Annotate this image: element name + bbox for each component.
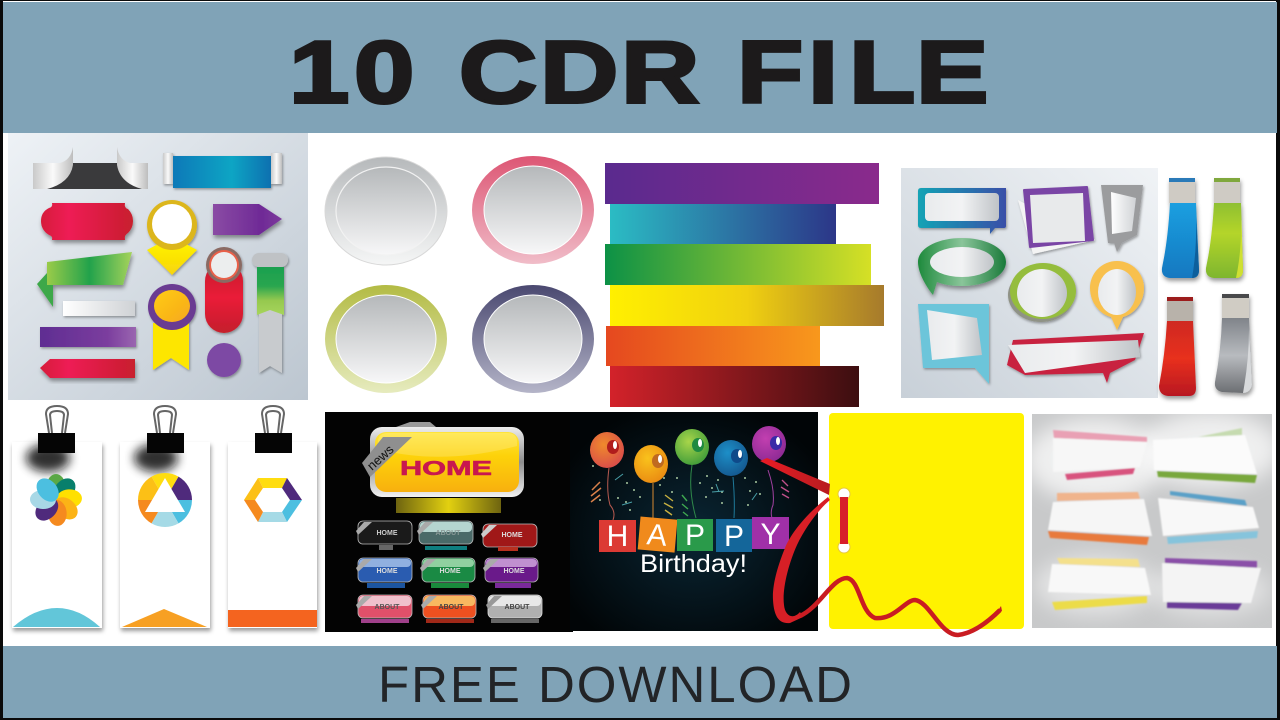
red plaque label <box>41 203 133 240</box>
happy letter tiles: A <box>646 518 668 553</box>
panel: speech bubbles <box>901 168 1158 398</box>
happy letter tiles: P <box>724 520 744 553</box>
large home button <box>362 422 524 513</box>
small button green: HOME <box>440 568 461 575</box>
small button green <box>420 558 475 588</box>
orange triangle footer <box>122 609 207 627</box>
hanging tag: triangle logo <box>120 406 210 628</box>
orange round bubble <box>1090 261 1144 330</box>
hanging tag: flower logo <box>12 406 102 628</box>
ink smudge <box>26 444 70 472</box>
green folded ribbon <box>37 252 132 307</box>
small button blue <box>356 558 412 588</box>
happy letter tiles: Y <box>760 518 781 551</box>
flower logo <box>30 474 83 527</box>
binder clip <box>255 406 292 453</box>
panel: web buttons <box>325 412 573 632</box>
birthday caption: Birthday! <box>640 550 747 578</box>
small button pink <box>356 595 412 623</box>
crimson ribbon bubble <box>1007 333 1144 383</box>
header band <box>0 2 1277 133</box>
small button silver <box>486 595 542 623</box>
hanging tag: hexagon logo <box>228 406 317 628</box>
confetti <box>591 465 789 516</box>
grey trapezoid bubble <box>1101 185 1143 252</box>
gold stand <box>396 498 501 513</box>
hexagon logo <box>244 478 302 522</box>
red ribbon <box>760 458 1002 635</box>
blue tab <box>1162 178 1199 278</box>
stacked colour bars <box>605 163 884 407</box>
blue banner <box>1158 491 1259 544</box>
pink banner <box>1053 430 1147 480</box>
small button orange <box>421 595 476 623</box>
ink smudge <box>134 444 178 472</box>
panel: yellow sheet <box>829 413 1024 629</box>
plain silver circle <box>325 157 447 265</box>
small button purple <box>483 558 538 588</box>
orange bar footer <box>228 610 317 627</box>
yellow medal ribbon <box>148 284 196 370</box>
blue scroll banner <box>163 153 282 188</box>
title: 10 CDR FILE <box>0 23 988 121</box>
slate circle <box>472 285 594 393</box>
purple square bubble <box>1018 187 1095 254</box>
binder clip <box>147 406 184 453</box>
panel: ribbons and banners <box>8 133 308 400</box>
small button red <box>481 524 537 551</box>
triangle wheel logo <box>138 473 192 527</box>
binder clip <box>38 406 75 453</box>
footer band <box>3 646 1277 718</box>
small button red: HOME <box>502 532 523 539</box>
green tab <box>1206 178 1243 278</box>
panel: happy birthday card <box>570 412 818 631</box>
ribbon slot <box>838 488 850 553</box>
home label: HOME <box>400 458 492 480</box>
balloons <box>590 426 786 483</box>
violet banner <box>1162 558 1261 610</box>
footer caption: FREE DOWNLOAD <box>378 656 852 713</box>
pink circle <box>472 156 594 264</box>
happy letter tiles <box>599 516 789 554</box>
red tab <box>1159 297 1196 396</box>
yellow circle arrow badge <box>147 200 197 275</box>
purple bar <box>40 327 136 347</box>
small button black: HOME <box>376 530 398 537</box>
yellow banner <box>1048 558 1151 610</box>
small button pink: ABOUT <box>375 604 400 611</box>
small button black <box>356 521 412 550</box>
large home button: news <box>364 441 397 473</box>
lime circle <box>325 285 447 393</box>
small button purple: HOME <box>504 568 525 575</box>
panel: paper banners <box>1025 412 1280 628</box>
small button teal <box>417 521 473 550</box>
news ribbon <box>362 437 412 477</box>
small button teal: ABOUT <box>436 530 461 537</box>
green and grey bookmark <box>252 253 288 373</box>
green oval bubble <box>918 238 1006 295</box>
small button blue: HOME <box>376 568 398 575</box>
orange banner <box>1048 492 1152 545</box>
green banner <box>1153 428 1257 483</box>
small button orange: ABOUT <box>439 604 464 611</box>
purple dot <box>207 343 241 377</box>
light blue bubble <box>918 304 989 384</box>
red arrow bar <box>40 359 135 378</box>
happy letter tiles: P <box>685 519 705 552</box>
blue bubble <box>918 188 1006 234</box>
lime round bubble <box>1008 263 1076 322</box>
blue arc footer <box>13 608 100 627</box>
balloon strings <box>608 465 773 520</box>
dark folded banner <box>33 147 148 189</box>
purple arrow tag <box>213 204 282 235</box>
red pill with button <box>205 247 243 333</box>
happy letter tiles: H <box>607 520 628 553</box>
grey tab <box>1215 294 1252 393</box>
small button silver: ABOUT <box>505 604 530 611</box>
white bar <box>63 301 135 316</box>
